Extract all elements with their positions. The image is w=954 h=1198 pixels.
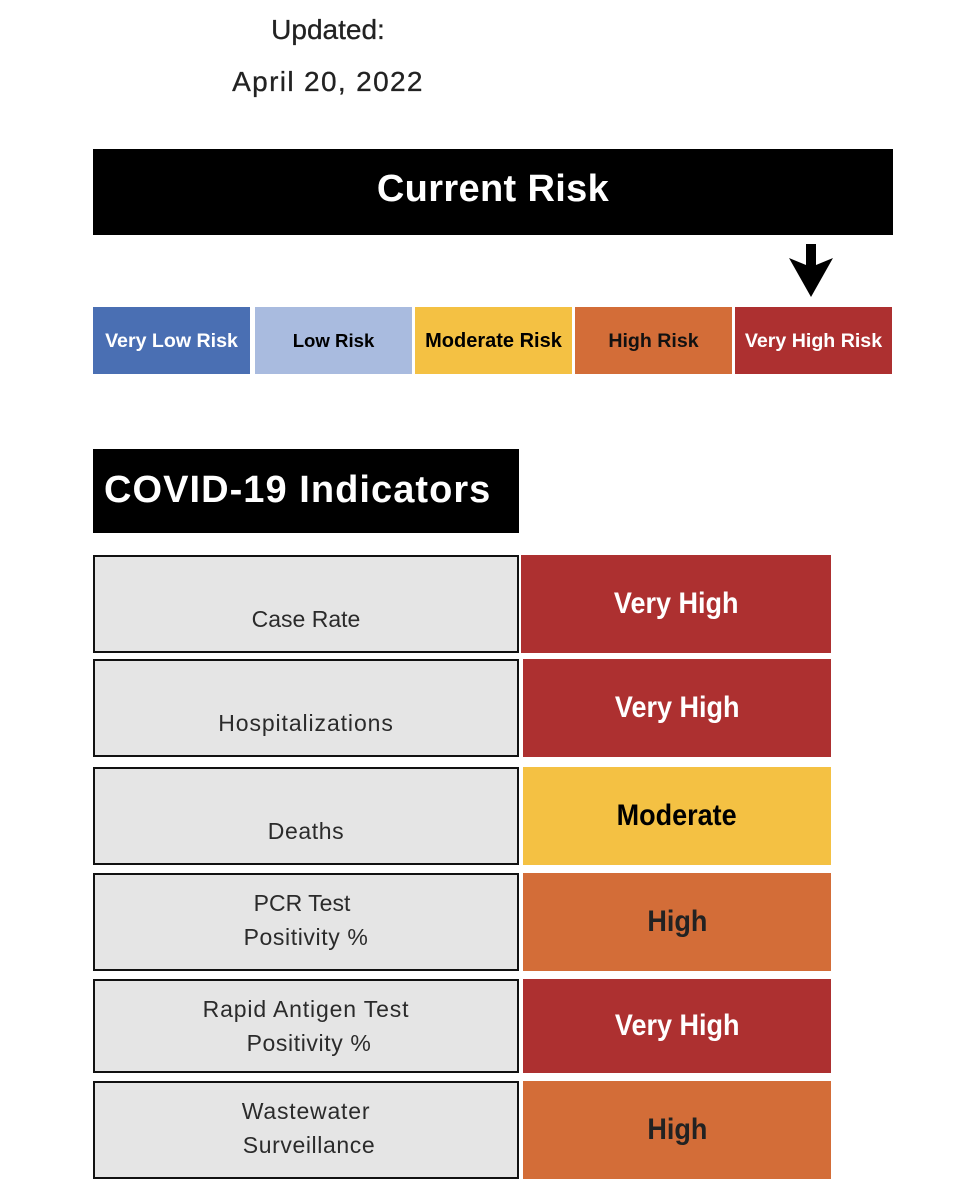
indicator label: pcr test positivity xyxy=(93,873,519,971)
risk level: very high: Very High Risk xyxy=(745,330,882,352)
updated date xyxy=(232,14,424,98)
heading: current risk: Current Risk xyxy=(377,168,609,210)
indicator label: rapid antigen test positivity: Positivity % xyxy=(247,1030,371,1056)
heading: covid-19 indicators xyxy=(93,449,519,533)
risk level: moderate: Moderate Risk xyxy=(425,330,562,352)
risk level: low xyxy=(255,307,412,374)
indicator label: wastewater surveillance: Wastewater xyxy=(242,1098,370,1124)
updated date: Updated: xyxy=(271,14,385,45)
indicator value: wastewater surveillance xyxy=(523,1081,831,1179)
risk level: low: Low Risk xyxy=(293,330,374,350)
indicator label: case rate xyxy=(93,555,519,653)
risk level: very low xyxy=(93,307,250,374)
icon: arrow pointing to very high risk xyxy=(789,244,833,297)
updated date: April 20, 2022 xyxy=(232,66,424,97)
indicator label: wastewater surveillance xyxy=(93,1081,519,1179)
indicator value: wastewater surveillance: High xyxy=(647,1113,707,1146)
indicator label: pcr test positivity: PCR Test xyxy=(254,890,350,916)
risk scale xyxy=(93,307,892,374)
indicator value: hospitalizations xyxy=(523,659,831,757)
risk level: high: High Risk xyxy=(608,330,699,352)
indicator value: rapid antigen test positivity: Very High xyxy=(615,1009,739,1042)
risk level: high xyxy=(575,307,732,374)
indicator value: case rate xyxy=(521,555,831,653)
heading: covid-19 indicators: COVID-19 Indicators xyxy=(104,469,491,511)
indicator label: deaths xyxy=(93,767,519,865)
indicator label: pcr test positivity: Positivity % xyxy=(244,924,368,950)
indicator value: pcr test positivity xyxy=(523,873,831,971)
indicator value: hospitalizations: Very High xyxy=(615,691,739,724)
indicator label: wastewater surveillance: Surveillance xyxy=(243,1132,375,1158)
indicator value: deaths: Moderate xyxy=(617,799,737,832)
indicator value: rapid antigen test positivity xyxy=(523,979,831,1073)
risk level: very high xyxy=(735,307,892,374)
indicator label: hospitalizations: Hospitalizations xyxy=(218,710,394,736)
indicator label: case rate: Case Rate xyxy=(252,606,360,632)
indicator label: deaths: Deaths xyxy=(268,818,344,844)
risk level: very low: Very Low Risk xyxy=(105,330,238,352)
heading: current risk xyxy=(93,149,893,235)
risk level: moderate xyxy=(415,307,572,374)
indicator value: case rate: Very High xyxy=(614,587,738,620)
indicator label: hospitalizations xyxy=(93,659,519,757)
indicator value: pcr test positivity: High xyxy=(647,905,707,938)
indicator label: rapid antigen test positivity xyxy=(93,979,519,1073)
indicator value: deaths xyxy=(523,767,831,865)
indicator label: rapid antigen test positivity: Rapid Antigen Test xyxy=(203,996,409,1022)
